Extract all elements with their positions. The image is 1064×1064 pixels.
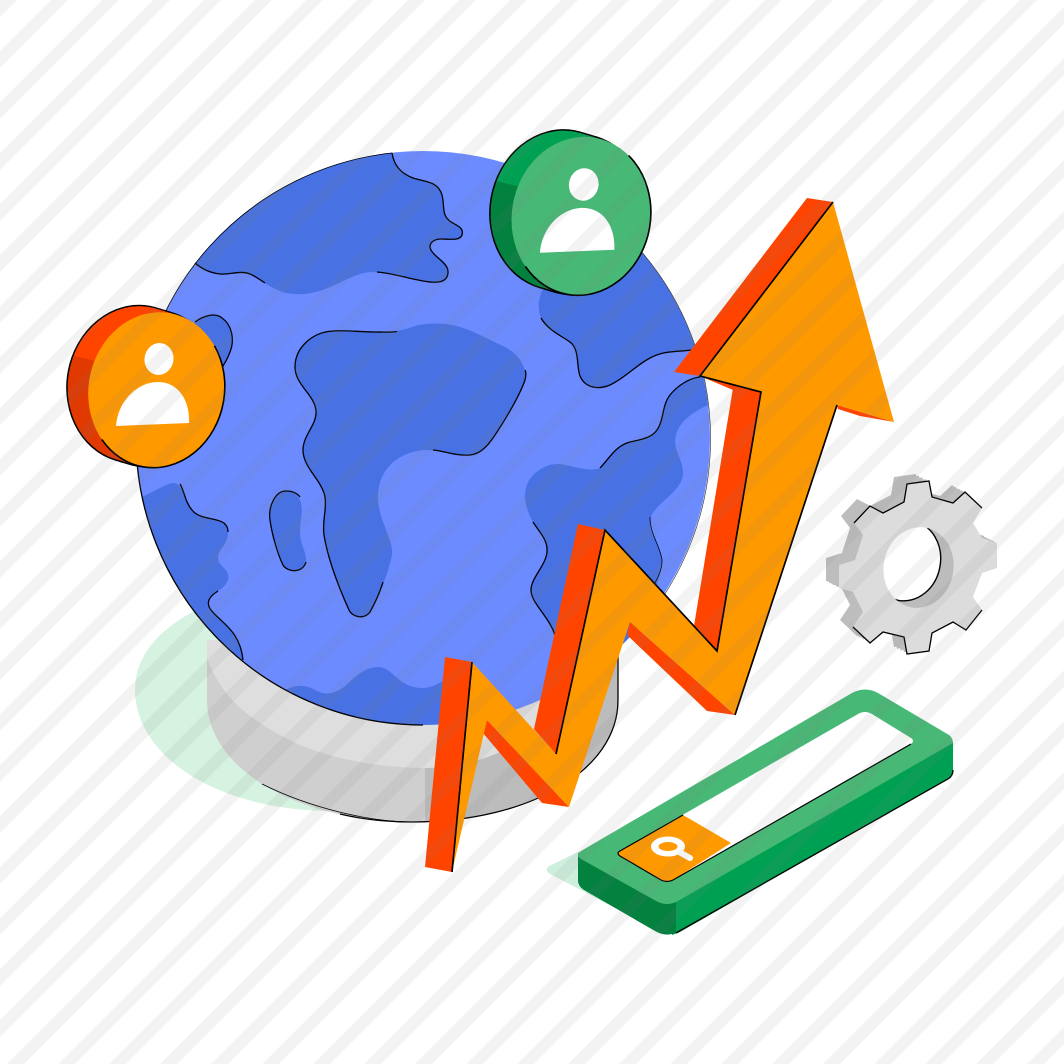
continents: [120, 150, 715, 735]
arrow outline: [556, 202, 833, 754]
ocean: [136, 151, 710, 725]
bar left side: [578, 853, 676, 935]
globe shadow: [135, 600, 400, 811]
icon: magnifying glass: [651, 836, 690, 858]
user icon: [540, 165, 614, 253]
green user coin: [489, 129, 652, 296]
growth arrow: [425, 198, 894, 872]
search bar shadow: [547, 851, 615, 908]
globe base: [207, 640, 618, 822]
bar right side: [672, 742, 953, 935]
arrow front face: [452, 202, 894, 872]
globe outline: [136, 153, 392, 438]
globe: [120, 150, 715, 735]
gear icon: [826, 474, 997, 654]
arrow side faces: [425, 198, 894, 872]
search bar: [578, 690, 953, 935]
search input: [618, 712, 913, 882]
bar top face: [578, 690, 953, 904]
search button: [618, 815, 731, 882]
user icon: [116, 340, 189, 426]
continent outlines: [180, 153, 700, 660]
orange user coin: [66, 304, 226, 468]
